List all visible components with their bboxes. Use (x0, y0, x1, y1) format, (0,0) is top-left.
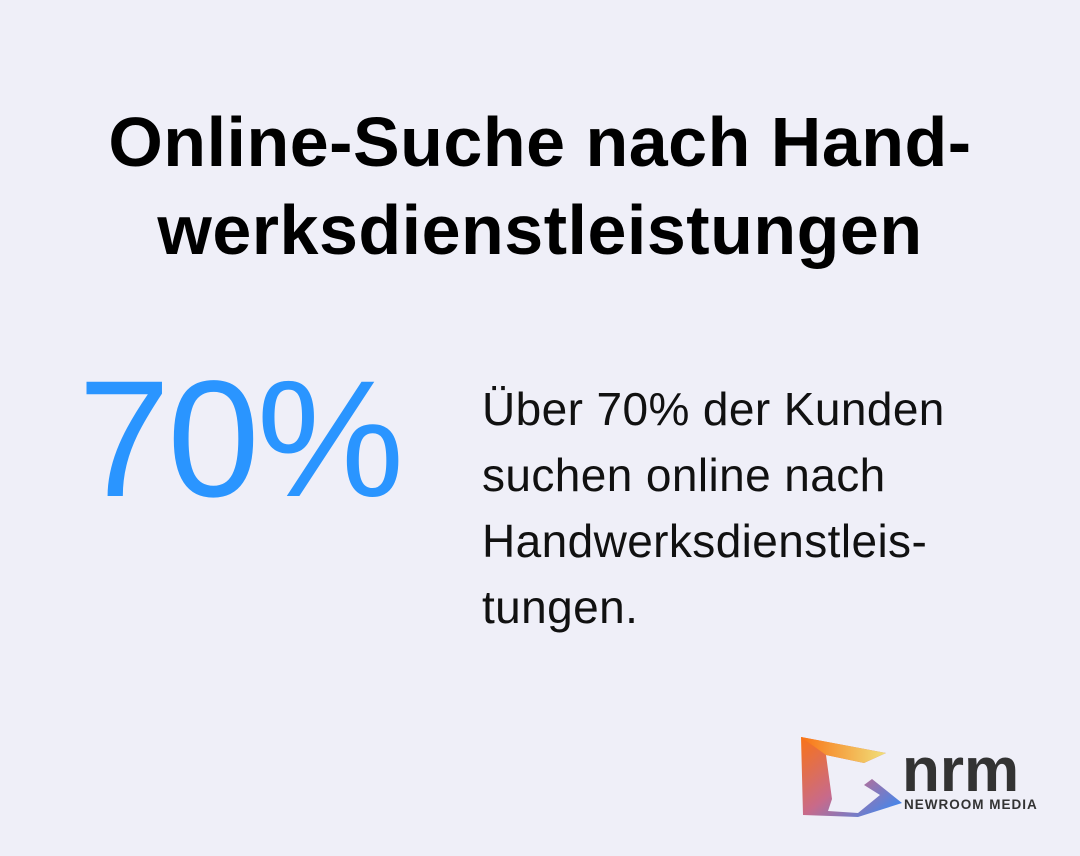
logo: nrm newroom media (801, 736, 1038, 817)
logo: nrm newroom media: nrm (902, 736, 1019, 805)
stat: 70%: 70% (78, 347, 401, 532)
description text: Über 70% der Kunden (482, 383, 945, 435)
title: Online-Suche nach Hand- (108, 103, 972, 181)
title: werksdienstleistungen (157, 191, 923, 269)
title (108, 103, 972, 269)
logo: nrm newroom media: NEWROOM MEDIA (904, 797, 1038, 812)
description text: suchen online nach (482, 449, 886, 501)
description text: Handwerksdienstleis- (482, 515, 927, 567)
description text (482, 383, 945, 633)
description text: tungen. (482, 581, 638, 633)
